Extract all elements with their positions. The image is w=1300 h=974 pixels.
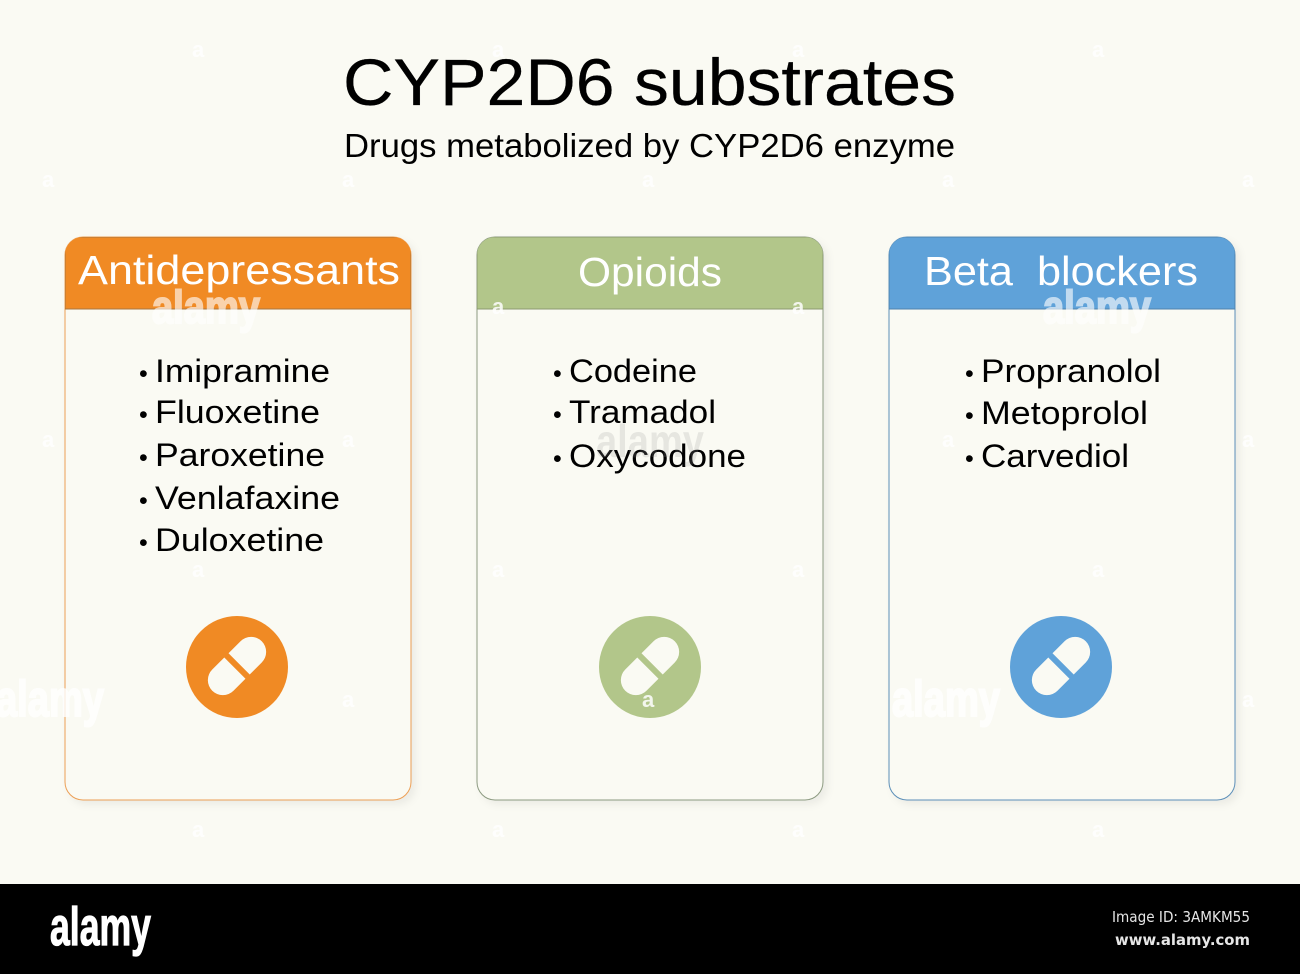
watermarks: alamy bbox=[1043, 281, 1151, 333]
watermarks: a bbox=[1242, 687, 1255, 712]
watermarks: a bbox=[492, 817, 505, 842]
drug list: antidepressants: • bbox=[139, 444, 148, 472]
drug list: beta blockers: • bbox=[965, 445, 974, 473]
watermarks: a bbox=[792, 37, 805, 62]
drug list: antidepressants: Fluoxetine bbox=[155, 394, 320, 430]
watermarks: a bbox=[492, 557, 505, 582]
drug list: antidepressants bbox=[139, 353, 340, 558]
icon: pill green bbox=[599, 616, 701, 718]
watermarks: a bbox=[1242, 167, 1255, 192]
watermarks: a bbox=[192, 557, 205, 582]
drug list: antidepressants: Imipramine bbox=[155, 353, 330, 389]
icon: pill orange bbox=[186, 616, 288, 718]
watermarks: a bbox=[1242, 427, 1255, 452]
drug list: antidepressants: Venlafaxine bbox=[155, 480, 340, 516]
watermarks: a bbox=[792, 817, 805, 842]
drug list: beta blockers: • bbox=[965, 402, 974, 430]
heading: opioids: Opioids bbox=[578, 249, 722, 295]
watermarks: a bbox=[1092, 37, 1105, 62]
drug list: antidepressants: Duloxetine bbox=[155, 522, 324, 558]
watermarks: a bbox=[792, 557, 805, 582]
panel: antidepressants bbox=[65, 237, 411, 800]
subtitle: Drugs metabolized by CYP2D6 enzyme bbox=[344, 127, 955, 164]
footer logo: alamy bbox=[50, 897, 151, 957]
watermarks: a bbox=[492, 294, 505, 319]
drug list: beta blockers: Propranolol bbox=[981, 353, 1161, 389]
website: www.alamy.com bbox=[1115, 931, 1250, 949]
panel: beta blockers bbox=[889, 237, 1235, 800]
watermarks: a bbox=[42, 427, 55, 452]
watermarks: a bbox=[342, 687, 355, 712]
watermarks: alamy bbox=[0, 671, 104, 727]
header: antidepressants bbox=[65, 237, 411, 309]
drug list: antidepressants: • bbox=[139, 401, 148, 429]
icon: pill blue bbox=[1010, 616, 1112, 718]
drug list: antidepressants: • bbox=[139, 529, 148, 557]
drug list: antidepressants: • bbox=[139, 487, 148, 515]
watermarks: a bbox=[492, 37, 505, 62]
drug list: opioids bbox=[553, 353, 746, 474]
watermarks: a bbox=[342, 427, 355, 452]
drug list: antidepressants: Paroxetine bbox=[155, 437, 325, 473]
watermarks: a bbox=[192, 817, 205, 842]
footer bar bbox=[0, 884, 1300, 974]
watermarks: a bbox=[342, 167, 355, 192]
drug list: opioids: Oxycodone bbox=[569, 438, 746, 474]
watermarks: alamy bbox=[892, 671, 1000, 727]
watermarks: alamy bbox=[152, 281, 260, 333]
drug list: antidepressants: • bbox=[139, 360, 148, 388]
watermarks: a bbox=[642, 167, 655, 192]
heading: antidepressants: Antidepressants bbox=[78, 247, 400, 293]
watermarks bbox=[0, 37, 1255, 842]
drug list: beta blockers bbox=[965, 353, 1161, 474]
drug list: beta blockers: Carvediol bbox=[981, 438, 1129, 474]
watermarks: a bbox=[192, 37, 205, 62]
drug list: opioids: • bbox=[553, 445, 562, 473]
drug list: beta blockers: • bbox=[965, 360, 974, 388]
panel: opioids bbox=[477, 237, 823, 800]
watermarks: a bbox=[792, 294, 805, 319]
watermarks: a bbox=[1092, 817, 1105, 842]
watermarks: a bbox=[642, 687, 655, 712]
title: CYP2D6 substrates bbox=[343, 45, 956, 119]
drug list: opioids: • bbox=[553, 401, 562, 429]
image id: Image ID: 3AMKM55 bbox=[1112, 908, 1250, 926]
watermarks: a bbox=[42, 167, 55, 192]
watermarks: a bbox=[1092, 557, 1105, 582]
drug list: opioids: Tramadol bbox=[569, 394, 716, 430]
drug list: opioids: Codeine bbox=[569, 353, 697, 389]
heading: beta blockers: Beta blockers bbox=[924, 248, 1198, 294]
header: opioids bbox=[477, 237, 823, 309]
watermarks: alamy bbox=[596, 415, 704, 467]
header: beta blockers bbox=[889, 237, 1235, 309]
watermarks: a bbox=[942, 427, 955, 452]
drug list: beta blockers: Metoprolol bbox=[981, 395, 1148, 431]
drug list: opioids: • bbox=[553, 360, 562, 388]
watermarks: a bbox=[942, 167, 955, 192]
